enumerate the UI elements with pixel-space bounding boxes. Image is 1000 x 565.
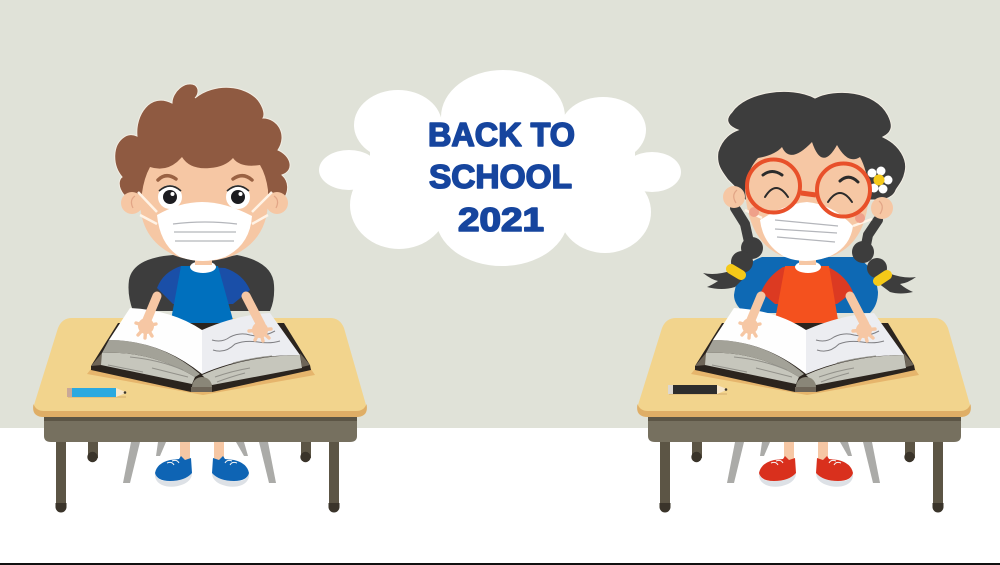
girl open book — [691, 308, 919, 395]
girl closed eyes and brows — [763, 172, 858, 202]
girl shirt — [761, 266, 853, 335]
girl arms and hands — [740, 296, 875, 341]
boy face — [140, 157, 268, 261]
boy legs and shoes — [155, 440, 249, 487]
boy open book — [87, 308, 315, 395]
boy eyes — [158, 185, 250, 209]
girl neck and collar — [795, 256, 821, 273]
girl ears — [723, 186, 893, 219]
black pencil — [668, 385, 728, 395]
title text: BACK TO — [428, 116, 575, 153]
boy eyebrows — [158, 176, 252, 180]
girl desk base — [648, 417, 961, 512]
floor — [0, 428, 1000, 563]
speech cloud with title — [319, 70, 681, 266]
girl legs and shoes — [759, 440, 853, 487]
blue pencil — [67, 388, 127, 398]
girl at desk — [637, 91, 971, 512]
girl desk top — [637, 318, 971, 417]
girl chair legs — [727, 442, 880, 483]
girl glasses — [747, 160, 870, 216]
title text: 2021 — [458, 201, 544, 238]
cloud shape — [319, 70, 681, 266]
boy ears — [121, 192, 288, 214]
boy at desk — [33, 84, 367, 512]
boy chair back — [128, 255, 274, 311]
boy arms and hands — [136, 296, 271, 341]
bottom border line — [0, 563, 1000, 565]
boy desk top — [33, 318, 367, 417]
girl flower — [868, 166, 892, 194]
boy mask — [138, 192, 272, 261]
girl hair — [718, 91, 906, 200]
girl chair back — [734, 257, 878, 313]
boy shirt — [157, 266, 250, 335]
boy neck and collar — [190, 256, 216, 273]
title text — [428, 116, 575, 238]
background wall — [0, 0, 1000, 428]
title text: SCHOOL — [429, 158, 572, 195]
girl braids — [703, 208, 916, 294]
boy chair legs — [123, 442, 276, 483]
boy hair — [115, 84, 290, 200]
girl mask — [745, 202, 872, 261]
boy desk base — [44, 417, 357, 512]
girl face — [745, 142, 869, 260]
